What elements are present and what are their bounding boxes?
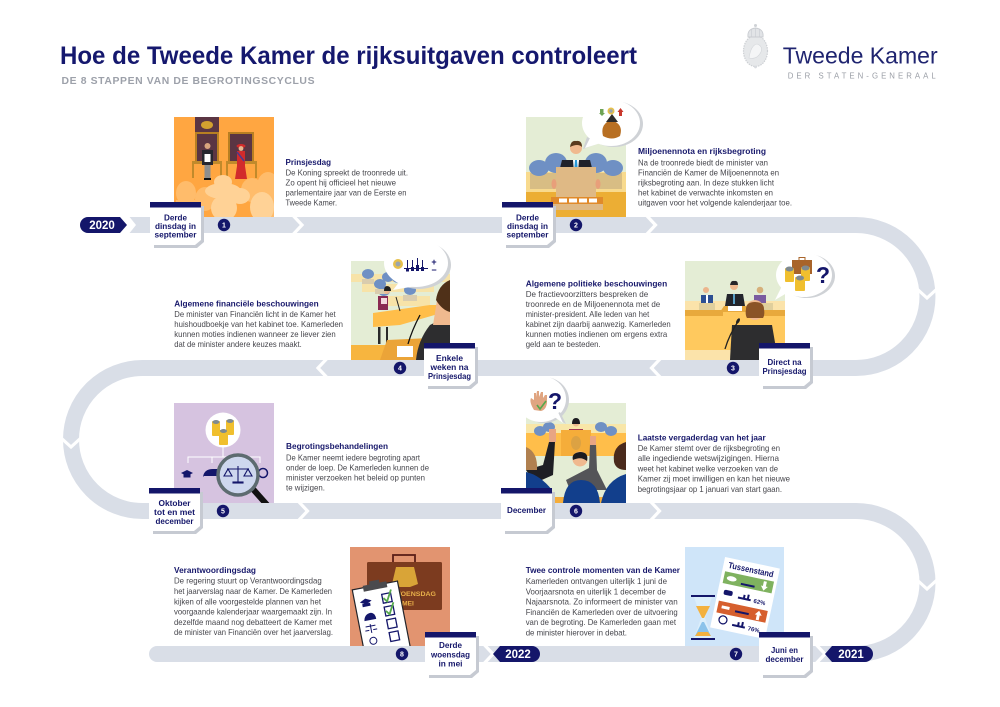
body text: het kabinet de verwachte inkomsten en — [638, 188, 773, 198]
body text: weet het kabinet welke verzoeken van de — [637, 464, 778, 473]
body text: begrotingsjaar op 1 januari van start gaan. — [638, 485, 782, 494]
date card: Juni en — [771, 645, 798, 655]
speech bubble: purse — [582, 100, 643, 149]
heading: Prinsjesdag — [286, 157, 331, 167]
heading: Twee controle momenten van de Kamer — [526, 565, 681, 575]
logo wordmark: Tweede Kamer — [783, 42, 938, 68]
date card: september — [154, 230, 197, 240]
illustration: minister at lectern — [351, 261, 450, 360]
body text: geld aan te besteden. — [526, 340, 601, 349]
illustration: throne speech — [174, 117, 279, 222]
body text: de minister van Financiën over het jaarverslag. — [174, 628, 333, 637]
date card: woensdag — [430, 650, 470, 660]
step number 4 — [394, 362, 406, 374]
step number 2: 2 — [574, 223, 578, 230]
date card: in mei — [438, 658, 462, 668]
body text — [638, 158, 792, 208]
panel: step 7 Twee controle momenten — [526, 547, 813, 678]
heading: Laatste vergaderdag van het jaar — [638, 432, 766, 442]
illustration: magnifier over budget — [174, 403, 274, 506]
body text — [637, 444, 790, 494]
body text: Zo opent hij officieel het nieuwe — [286, 179, 396, 188]
body text — [174, 310, 343, 349]
illustration: vote by raised hands — [526, 403, 626, 503]
hourglass — [691, 595, 715, 640]
step number 5 — [217, 505, 229, 517]
body text — [286, 169, 408, 208]
illustration: debate in chamber — [685, 261, 785, 360]
illustration: minister with budget case — [526, 117, 626, 217]
date card — [149, 488, 203, 534]
panel: step 5 Begrotingsbehandelingen — [149, 403, 429, 534]
illustration: briefcase and checklist: WOENSDAG — [394, 591, 436, 598]
date card: Prinsjesdag — [762, 366, 806, 376]
year marker 2021: 2021 — [838, 649, 864, 661]
date card: december — [156, 516, 194, 526]
date card: dinsdag in — [507, 221, 548, 231]
date card: Derde — [164, 212, 187, 222]
score sheet: 62% — [753, 599, 766, 607]
body text: minister-president. Alle leden van het — [526, 310, 650, 319]
date card: december — [766, 654, 804, 664]
step number 7 — [730, 648, 742, 660]
body text: voorgaande kalenderjaar waargemaakt zijn. In — [174, 608, 332, 617]
body text: Financiën de Kamerleden over de uitvoering — [526, 608, 678, 617]
step number 2 — [570, 219, 582, 231]
body text: Kamerleden ontvangen uiterlijk 1 juni de — [526, 577, 667, 586]
score sheet: 76% — [747, 626, 761, 635]
body text: te wijzigen. — [286, 484, 325, 493]
date card: Derde — [516, 212, 539, 222]
step number 5: 5 — [221, 509, 225, 516]
body text: het jaarverslag naar de Kamer. De Kamerleden — [174, 587, 332, 596]
panel: step 4 Algemene financiele beschouwingen — [174, 239, 478, 389]
date card: December — [507, 505, 547, 515]
body text — [174, 577, 333, 637]
speech bubble: hand and question mark: ? — [548, 388, 562, 414]
body text: alle ingediende wetswijzigingen. Hierna — [638, 454, 779, 463]
heading: Miljoenennota en rijksbegroting — [638, 146, 766, 156]
step number 3: 3 — [731, 366, 735, 373]
title: Hoe de Tweede Kamer de rijksuitgaven controleert — [60, 42, 638, 70]
date card: Direct na — [768, 357, 802, 367]
logo: Tweede Kamer — [744, 24, 938, 80]
body text — [526, 577, 678, 638]
body text: Na de troonrede biedt de minister van — [638, 158, 768, 168]
speech bubble: coins and question mark: ? — [816, 262, 830, 288]
panel: step 6 Laatste vergaderdag — [501, 376, 790, 534]
date card — [425, 632, 479, 678]
body text: parlementaire jaar van de Eerste en — [286, 189, 407, 198]
step number 4: 4 — [398, 366, 402, 373]
illustration: interim score sheet and hourglass — [685, 547, 784, 646]
body text — [286, 454, 429, 493]
date card: tot en met — [154, 507, 195, 517]
body text: troonrede en de Miljoenennota met de — [526, 300, 661, 309]
body text: De fractievoorzitters bespreken de — [526, 290, 649, 299]
body text: kunnen moties indienen wanneer ze liever zien — [174, 330, 336, 339]
step number 1: 1 — [222, 223, 226, 230]
heading: Verantwoordingsdag — [174, 565, 256, 575]
speech bubble: hand and question mark — [516, 376, 569, 424]
score sheet: Tussenstand — [727, 560, 775, 579]
step number 8 — [396, 648, 408, 660]
panel: step 8 Verantwoordingsdag — [174, 547, 479, 678]
body text: kunnen moties indienen om ergens extra — [526, 330, 668, 339]
date card — [759, 343, 813, 389]
date card: Oktober — [158, 498, 191, 508]
step number 3 — [727, 362, 739, 374]
heading: Algemene financiële beschouwingen — [174, 298, 319, 308]
body text: De minister van Financiën licht in de Kamer het — [174, 310, 336, 319]
body text: kijken of alle voorgestelde plannen van het — [174, 597, 322, 606]
logo tagline: DER STATEN-GENERAAL — [788, 72, 936, 80]
body text: Najaarsnota. Zo informeert de minister van — [526, 598, 678, 607]
body text: van de begroting. De Kamerleden gaan met — [526, 618, 677, 627]
body text: Voorjaarsnota en uiterlijk 1 december de — [526, 587, 666, 596]
illustration: briefcase and checklist — [350, 547, 450, 646]
body text: onder de loep. De Kamerleden kunnen de — [286, 464, 429, 473]
date card — [150, 202, 204, 248]
body text: Financiën de Kamer de Miljoenennota en — [638, 168, 779, 178]
step number 6 — [570, 505, 582, 517]
date card: dinsdag in — [155, 221, 196, 231]
date card: Derde — [439, 640, 462, 650]
body text: kabinet zijn daarbij aanwezig. Kamerleden — [526, 320, 671, 329]
panel: step 3 Algemene politieke beschouwingen — [526, 253, 835, 389]
year marker 2021 — [825, 646, 873, 662]
body text: Tweede Kamer. — [286, 199, 337, 208]
year marker 2022 — [493, 646, 540, 662]
body text: dezelfde maand nog debatteert de Kamer met — [174, 618, 333, 627]
body text: de minister hierover in debat. — [526, 628, 627, 638]
date card: Prinsjesdag — [428, 371, 471, 381]
step number 7: 7 — [734, 652, 738, 659]
speech bubble: coin and chart — [384, 239, 451, 290]
icon: royal emblem — [744, 24, 768, 68]
body text — [526, 290, 671, 349]
date card — [502, 202, 556, 248]
body text: huishoudboekje van het kabinet toe. Kamerleden — [174, 320, 343, 329]
body text: uitgaven voor het volgende kalenderjaar toe. — [638, 198, 792, 208]
heading: Begrotingsbehandelingen — [286, 441, 388, 451]
speech bubble: coin and chart: + — [431, 257, 437, 267]
speech bubble: coins and question mark — [775, 253, 835, 300]
body text: minister verzoeken het beleid op punten — [286, 474, 425, 483]
date card: september — [506, 230, 549, 240]
subtitle: DE 8 STAPPEN VAN DE BEGROTINGSCYCLUS — [62, 76, 315, 87]
body text: dat de minister andere keuzes maakt. — [174, 340, 302, 349]
date card: weken na — [430, 362, 469, 372]
body text: De Kamer stemt over de rijksbegroting en — [638, 444, 780, 453]
body text: De regering stuurt op Verantwoordingsdag — [174, 577, 322, 586]
date card — [424, 343, 478, 389]
panel: step 2 Miljoenennota — [502, 100, 792, 248]
body text: rijksbegroting aan. In deze stukken licht — [638, 178, 775, 188]
date card — [759, 632, 813, 678]
year marker 2020: 2020 — [89, 220, 115, 232]
body text: De Kamer neemt iedere begroting apart — [286, 454, 421, 463]
step number 8: 8 — [400, 652, 404, 659]
speech bubble: coin and chart: − — [431, 265, 437, 275]
heading: Algemene politieke beschouwingen — [526, 278, 667, 288]
year marker 2022: 2022 — [505, 649, 531, 661]
step number 1 — [218, 219, 230, 231]
body text: Kamer zij moet inwilligen en kan het nieuwe — [638, 475, 790, 484]
score sheet — [710, 557, 780, 639]
date card: Enkele — [436, 353, 463, 363]
year marker 2020 — [80, 217, 127, 233]
illustration: briefcase and checklist: MEI — [402, 600, 414, 608]
panel: step 1 Prinsjesdag — [150, 117, 408, 248]
body text: De Koning spreekt de troonrede uit. — [286, 169, 408, 178]
timeline band — [60, 215, 938, 663]
step number 6: 6 — [574, 509, 578, 516]
date card — [501, 488, 555, 534]
